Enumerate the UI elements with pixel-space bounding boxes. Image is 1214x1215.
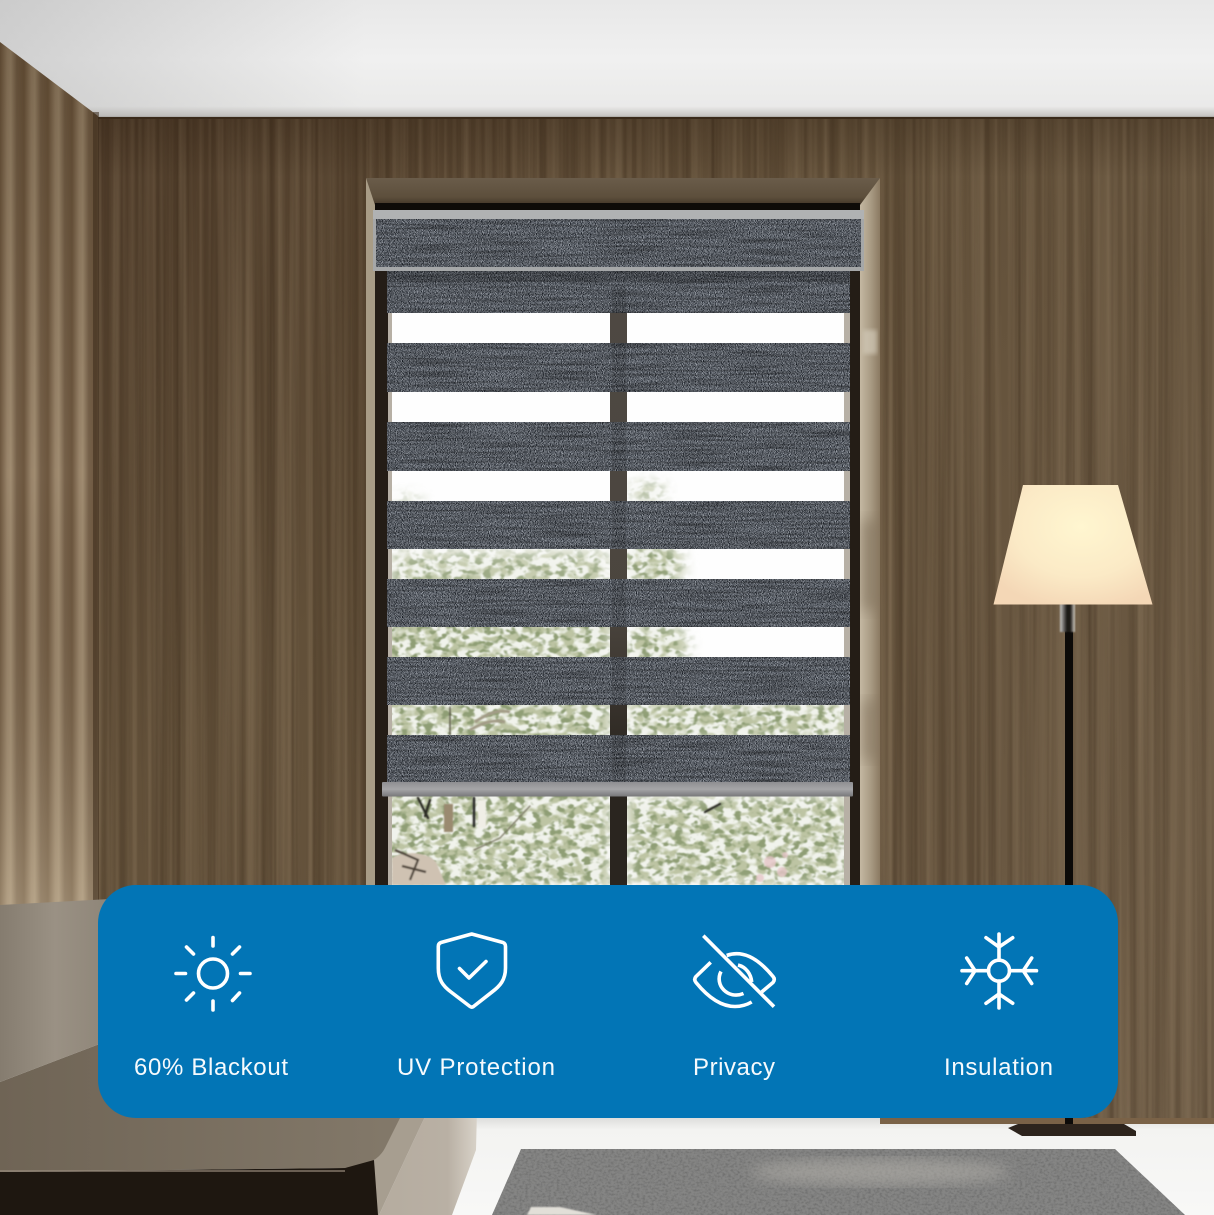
feature panel: [98, 885, 1118, 1118]
label: UV Protection: UV Protection: [397, 1054, 555, 1081]
left curtain: [0, 42, 99, 905]
label: 60% Blackout: 60% Blackout: [134, 1054, 288, 1081]
floor: [0, 1118, 1214, 1215]
fabric band 4: [387, 501, 850, 549]
feature: Privacy: [693, 936, 775, 1081]
glass panes: [392, 270, 610, 890]
branches: [392, 707, 788, 885]
mullion: [610, 270, 627, 890]
fabric band 7: [387, 735, 850, 782]
reveal top: [366, 178, 880, 205]
window recess: [366, 178, 880, 893]
rug: [490, 1149, 1190, 1215]
bottom rail: [382, 782, 853, 796]
sofa seat side strip: [374, 1110, 428, 1215]
ceiling: [0, 0, 1214, 118]
reveal right: [860, 178, 880, 890]
feature: UV Protection: [397, 934, 555, 1081]
icon: shield with check: [438, 934, 506, 1007]
fabric band 2: [387, 343, 850, 392]
label: Insulation: Insulation: [944, 1054, 1053, 1081]
icon: snowflake: [962, 934, 1036, 1008]
sofa seat: [0, 1040, 405, 1172]
reveal left: [366, 178, 375, 890]
fabric band 1: [387, 270, 850, 313]
fabric band 6: [387, 657, 850, 705]
floor lamp: [994, 485, 1152, 1136]
fabric band 5: [387, 579, 850, 627]
sofa arm side: [379, 1110, 477, 1215]
sofa back: [0, 899, 110, 1082]
sofa: [0, 899, 477, 1215]
lamp shade: [994, 485, 1152, 604]
fabric band 3: [387, 422, 850, 471]
icon: crossed-out eye: [695, 936, 774, 1007]
icon: sun: [176, 938, 250, 1010]
lamp pole: [1065, 622, 1073, 1127]
foliage outside window: [380, 470, 860, 890]
sofa base: [0, 1160, 378, 1215]
zebra blind fabric: [387, 270, 850, 782]
lamp base: [1008, 1124, 1136, 1136]
headrail cassette: [373, 210, 864, 271]
feature: Insulation: [944, 934, 1053, 1081]
frame light inner edge: [388, 270, 850, 890]
label: Privacy: Privacy: [693, 1054, 775, 1081]
dark frame: [375, 203, 860, 893]
wood wall: [98, 117, 1214, 1123]
feature: 60% Blackout: [134, 938, 288, 1081]
